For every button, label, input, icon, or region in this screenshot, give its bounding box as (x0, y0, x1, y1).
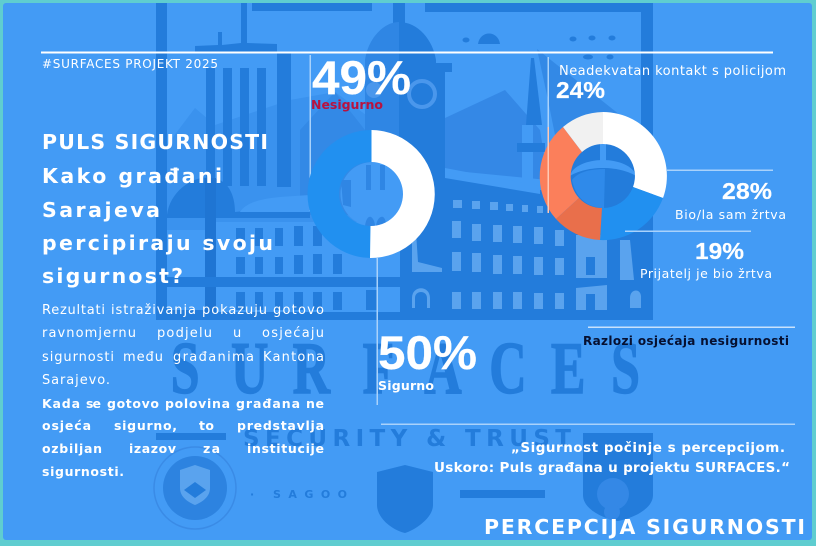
donut: reasons (540, 112, 667, 240)
stat: 19% friend victim: Prijatelj je bio žrtva (640, 266, 772, 281)
text block: findings: sigurnosti (42, 350, 114, 365)
text block: warning: za (203, 441, 220, 456)
text block: warning: Kada (42, 396, 80, 411)
connector: 24% (548, 57, 549, 213)
stat: 28% victim (675, 178, 786, 222)
background seal (154, 447, 236, 529)
background logo tagline: SECURITY & TRUST (243, 426, 571, 452)
rule above caption (588, 326, 795, 328)
stat: 50% safe: 50% (378, 326, 477, 379)
stat: 49% unsafe: 49% (312, 51, 411, 104)
background logo bars and city name (156, 433, 545, 501)
text block: findings: u (233, 326, 241, 341)
text block: warning: ozbiljan (42, 441, 102, 456)
title: PULS SIGURNOSTI (42, 130, 268, 154)
stat: 24%: 24% (556, 77, 605, 103)
title (42, 130, 273, 288)
title: percipiraju svoju (42, 231, 273, 255)
text block: warning (42, 396, 324, 479)
text block: warning: izazov (129, 441, 176, 456)
text block: findings: ravnomjernu (42, 326, 136, 341)
text block: findings: istraživanja (111, 303, 196, 318)
text block: warning: osjeća (42, 418, 91, 433)
text block: warning: gotovo (107, 396, 159, 411)
text block: warning: institucije (247, 441, 324, 456)
connector: 50% (376, 258, 378, 405)
stat: 49% unsafe: Nesigurno (311, 97, 383, 112)
text block: warning: to (199, 418, 214, 433)
text block: warning: ne (306, 396, 324, 411)
donut: safe vs unsafe (308, 130, 435, 258)
chart caption: Razlozi osjećaja nesigurnosti (583, 334, 789, 348)
text block: warning: sigurnosti. (42, 464, 124, 479)
text block: warning: polovina (165, 396, 230, 411)
background shield right (583, 433, 653, 521)
text block: findings: Rezultati (42, 303, 105, 318)
text block: warning: predstavlja (237, 418, 324, 433)
text block: findings: Kantona (263, 350, 324, 365)
text block: findings: građanima (173, 350, 254, 365)
text block: findings: pokazuju (202, 303, 267, 318)
quote (434, 440, 790, 476)
text block: findings: Sarajevo. (42, 373, 110, 388)
footer title: PERCEPCIJA SIGURNOSTI (484, 515, 805, 539)
stat: 19% friend victim (640, 238, 772, 281)
background shield left (377, 465, 433, 533)
stat: 19% friend victim: 19% (695, 238, 744, 264)
top rule (41, 52, 773, 54)
connector: 28% (667, 170, 773, 171)
title: Sarajeva (42, 198, 160, 222)
connector: 49% (310, 55, 311, 211)
quote: „Sigurnost počinje s percepcijom. (511, 440, 785, 456)
text block: findings: osjećaju (262, 326, 324, 341)
rule above quote (381, 424, 795, 425)
text block: findings: među (123, 350, 163, 365)
label: project tag: #SURFACES PROJEKT 2025 (42, 57, 218, 71)
title: Kako građani (42, 164, 222, 188)
text block: warning: se (86, 396, 101, 411)
connector: 19% (625, 230, 751, 232)
quote: Uskoro: Puls građana u projektu SURFACES.“ (434, 460, 790, 476)
text block: warning: građana (236, 396, 300, 411)
text block: findings: gotovo (273, 303, 324, 318)
text block: findings: podjelu (157, 326, 212, 341)
title: sigurnost? (42, 264, 183, 288)
text block: findings (42, 303, 324, 388)
background logo bars and city name: · SAGOO (250, 488, 347, 501)
stat: 50% safe: Sigurno (378, 378, 434, 393)
background logo wordmark: SURFACES (171, 327, 640, 409)
stat: 28% victim: Bio/la sam žrtva (675, 207, 786, 222)
label: inadequate police contact: Neadekvatan kontakt s policijom (559, 64, 786, 79)
stat: 28% victim: 28% (722, 178, 772, 204)
background image: Sarajevo building (156, 3, 653, 320)
text block: warning: sigurno, (114, 418, 177, 433)
